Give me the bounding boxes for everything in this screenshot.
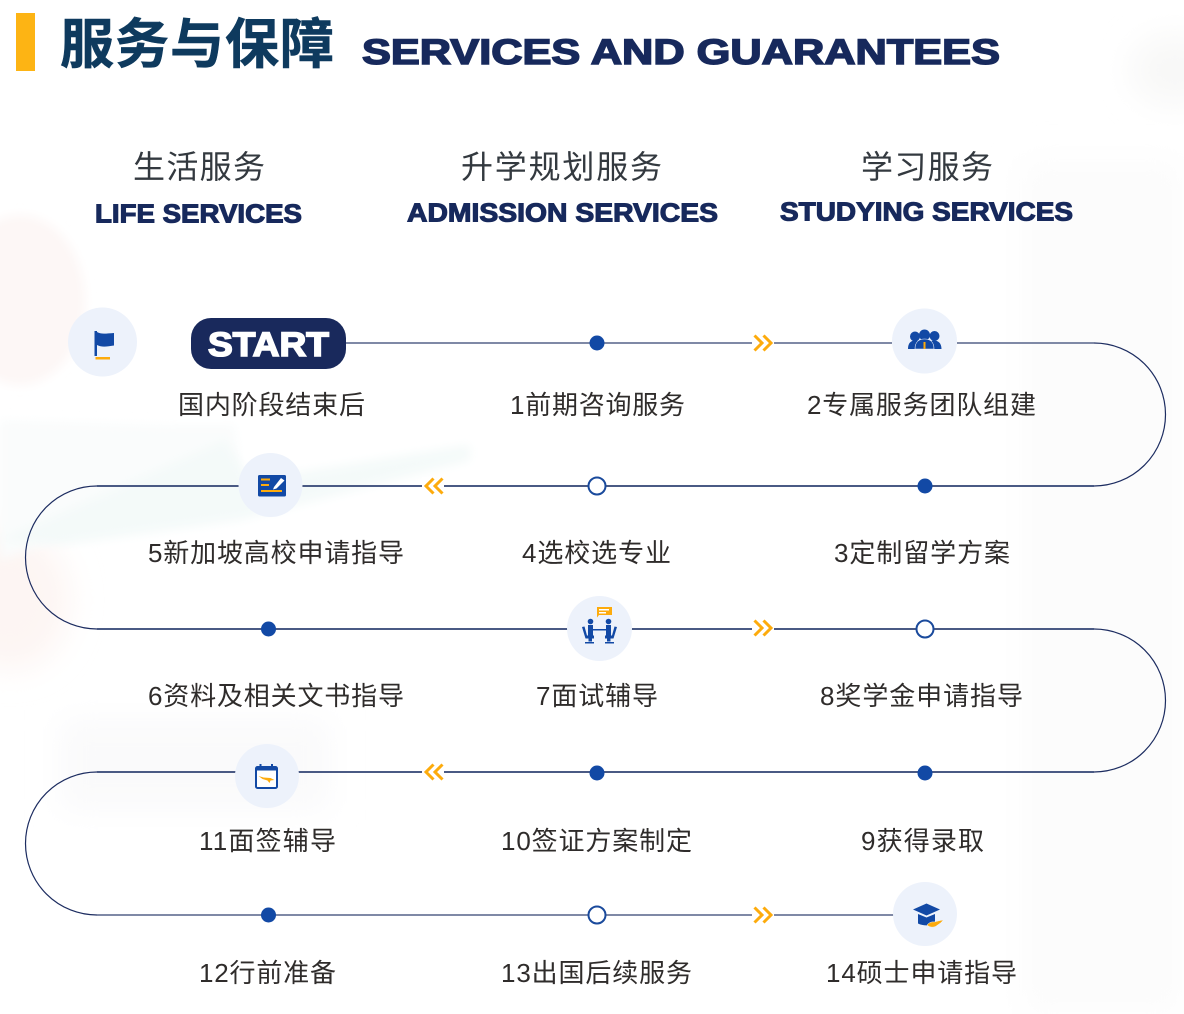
step labels: 11面签辅导 bbox=[199, 826, 336, 856]
column heading: life services: LIFE SERVICES bbox=[95, 198, 302, 228]
column heading: admission services: ADMISSION SERVICES bbox=[407, 198, 718, 228]
icon: graduation cap bbox=[893, 882, 957, 946]
heading accent bar bbox=[16, 13, 35, 71]
step labels: 9获得录取 bbox=[861, 826, 984, 856]
icon: calendar bbox=[235, 744, 299, 808]
column heading: admission services bbox=[407, 149, 718, 228]
title: SERVICES AND GUARANTEES bbox=[362, 33, 1000, 72]
step labels: 3定制留学方案 bbox=[834, 538, 1010, 568]
step labels: 2专属服务团队组建 bbox=[807, 390, 1036, 420]
timeline path bbox=[25, 343, 1165, 915]
step labels: 6资料及相关文书指导 bbox=[148, 681, 404, 711]
title bbox=[60, 15, 1000, 75]
title: 服务与保障 bbox=[60, 15, 334, 75]
step labels: 1前期咨询服务 bbox=[510, 390, 685, 420]
icon: team bbox=[892, 308, 957, 374]
column heading: studying services: STUDYING SERVICES bbox=[780, 196, 1073, 226]
icon: interview bbox=[567, 596, 632, 661]
column heading: studying services bbox=[780, 149, 1073, 226]
start badge: START bbox=[208, 326, 329, 364]
step labels bbox=[148, 390, 1036, 988]
step labels: 12行前准备 bbox=[199, 958, 336, 988]
icon: flag bbox=[68, 308, 137, 376]
step labels: 国内阶段结束后 bbox=[178, 390, 365, 420]
column heading: life services bbox=[95, 149, 302, 228]
step labels: 10签证方案制定 bbox=[501, 826, 692, 856]
column heading: admission services: 升学规划服务 bbox=[461, 149, 662, 185]
timeline dots bbox=[261, 336, 934, 924]
direction arrows bbox=[422, 334, 774, 924]
step labels: 5新加坡高校申请指导 bbox=[148, 538, 404, 568]
step labels: 14硕士申请指导 bbox=[826, 958, 1017, 988]
step labels: 8奖学金申请指导 bbox=[820, 681, 1023, 711]
step labels: 7面试辅导 bbox=[536, 681, 658, 711]
column heading: studying services: 学习服务 bbox=[861, 149, 993, 185]
start badge bbox=[191, 318, 346, 369]
column heading: life services: 生活服务 bbox=[133, 149, 265, 185]
step labels: 4选校选专业 bbox=[522, 538, 671, 568]
icon: application form bbox=[238, 453, 302, 517]
step labels: 13出国后续服务 bbox=[501, 958, 692, 988]
